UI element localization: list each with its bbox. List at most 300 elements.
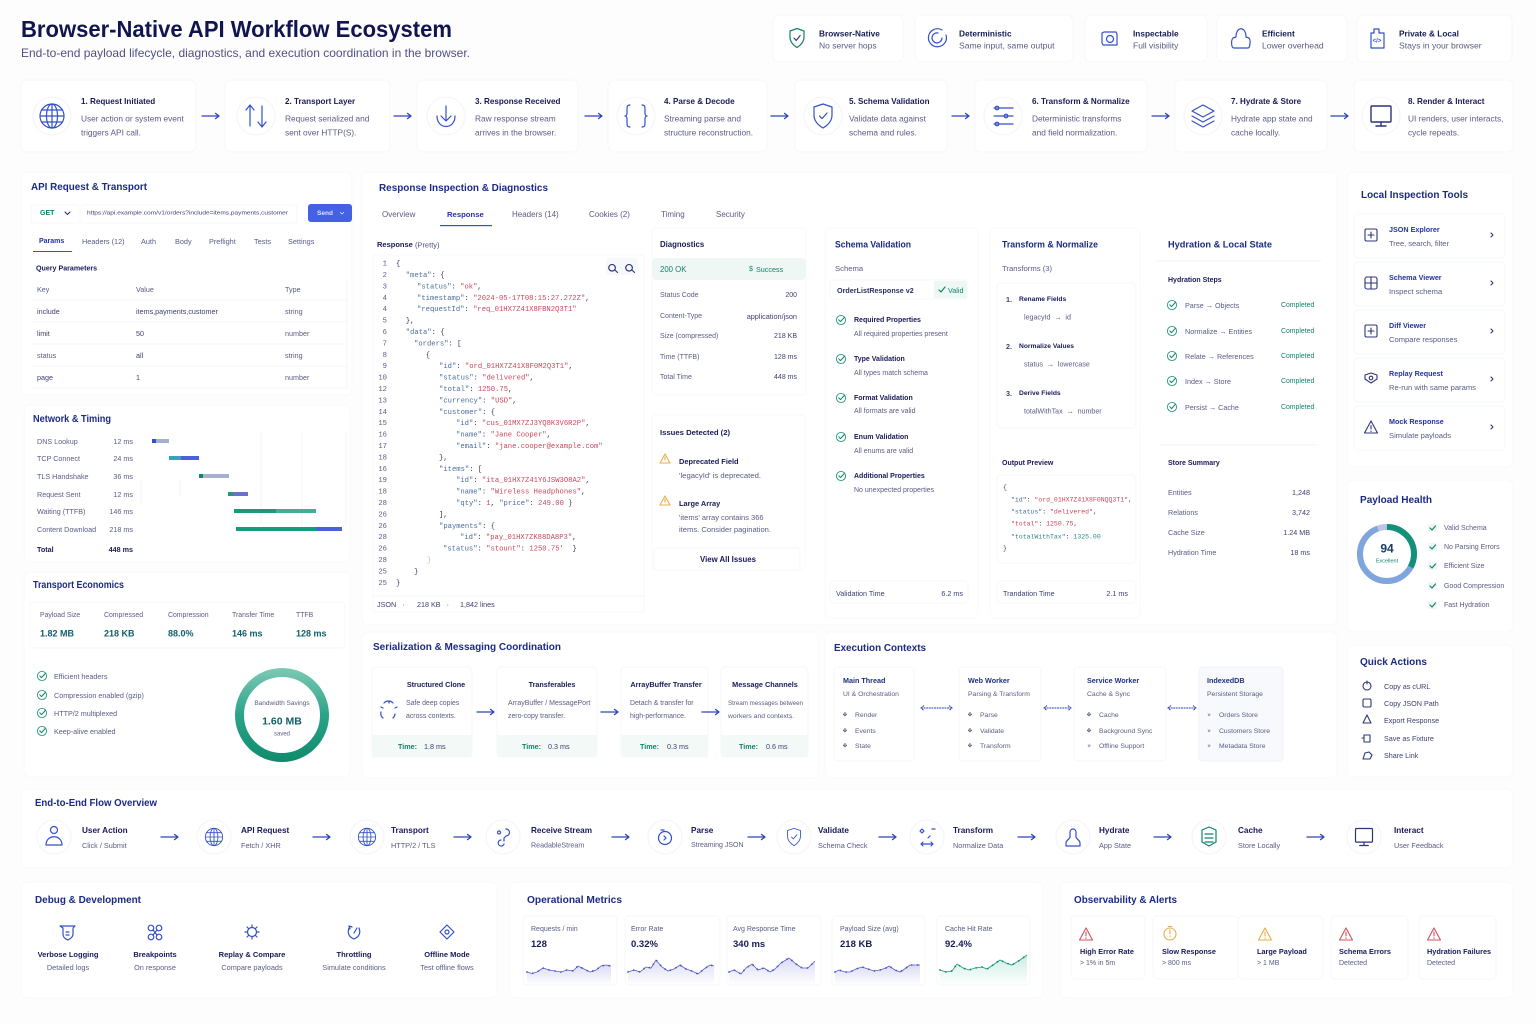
checklist: Compression enabled (gzip) [54, 691, 144, 700]
query parameters table: Value [136, 285, 154, 294]
stat cards: 146 ms [232, 628, 263, 638]
code viewer: 16 [378, 466, 387, 474]
transforms list: 3. [1006, 389, 1012, 398]
card: arraybuffer transfer: 0.3 ms [667, 742, 689, 751]
tool: diff viewer: Compare responses [1389, 335, 1458, 344]
tool: diff viewer [1354, 310, 1505, 354]
stat cards: 1.82 MB [40, 628, 75, 638]
code viewer: "status": "delivered", [439, 375, 534, 383]
code viewer: 4 [383, 295, 387, 303]
action list: Save as Fixture [1384, 734, 1434, 743]
code viewer: 13 [378, 397, 387, 405]
code viewer: "name": "Wireless Headphones", [456, 489, 585, 497]
code viewer: "id": "ita_01HX7Z41Y6JSW3O8A2", [456, 477, 590, 485]
tool: replay and compare: Replay & Compare [219, 950, 285, 959]
arrow [1152, 113, 1169, 119]
code viewer: { [426, 352, 430, 360]
card: transferables: zero-copy transfer. [508, 713, 565, 720]
stat cards: TTFB [296, 612, 314, 619]
step 5: 5. Schema Validation [849, 97, 930, 106]
code viewer: "timestamp": "2024-05-17T08:15:27.272Z", [417, 295, 590, 303]
card: arraybuffer transfer: Time: [640, 742, 659, 751]
diagnostics card: 200 OK [660, 265, 687, 274]
request tabs: Preflight [209, 237, 236, 246]
issues detected card [652, 415, 805, 570]
code viewer: 4 [383, 306, 387, 314]
step 1 [21, 80, 196, 152]
card: arraybuffer transfer: ArrayBuffer Transfer [630, 680, 702, 689]
card: indexeddb: » [1207, 712, 1211, 718]
metric: requests per minute: Requests / min [531, 926, 578, 933]
code viewer: 9 [383, 363, 387, 371]
code viewer: 1,842 lines [460, 600, 495, 609]
code viewer: 1 [383, 261, 387, 269]
metric: payload size: 218 KB [840, 939, 872, 950]
code viewer: "id": "pay_01HX7ZK88DA8P3", [460, 534, 576, 542]
step 2 [225, 80, 390, 152]
health checks: No Parsing Errors [1444, 544, 1500, 551]
card: transferables: Transferables [529, 680, 575, 689]
alert: hydration failures [1419, 916, 1496, 979]
arrow [454, 834, 471, 840]
arrow [161, 834, 178, 840]
flow: transform: Normalize Data [953, 841, 1004, 850]
issues detected card: Issues Detected (2) [660, 428, 731, 437]
output preview: Output Preview [1002, 460, 1054, 467]
code viewer: 3 [383, 283, 387, 291]
tool: replay request: Replay Request [1389, 369, 1444, 378]
arrow [202, 113, 219, 119]
tool: throttling [322, 926, 386, 972]
card: message channels [721, 667, 808, 757]
arrow [952, 113, 969, 119]
code viewer: 218 KB · [417, 600, 449, 609]
heading: Transform & Normalize [1002, 239, 1098, 249]
step 1: 1. Request Initiated [81, 97, 155, 106]
arrow [1018, 834, 1035, 840]
step 1: triggers API call. [81, 127, 141, 137]
translation time: 2.1 ms [1106, 589, 1128, 598]
card: transferables: ArrayBuffer / MessagePort [508, 700, 590, 707]
card: message channels: Time: [739, 742, 758, 751]
hydration steps: Index → Store [1185, 377, 1231, 386]
code viewer: } [427, 557, 431, 565]
code viewer: 8 [383, 352, 387, 360]
card: web worker: Transform [980, 743, 1011, 750]
health checks: Valid Schema [1444, 525, 1487, 532]
alert: slow response: Slow Response [1162, 947, 1216, 956]
validation list: Format Validation [854, 395, 913, 402]
panel: network and timing [24, 405, 350, 562]
flow: transport: HTTP/2 / TLS [391, 841, 436, 850]
stat cards: Payload Size [40, 612, 80, 619]
bandwidth donut: saved [274, 731, 290, 737]
alert: high error rate: High Error Rate [1080, 947, 1134, 956]
query parameters table [31, 264, 347, 388]
query parameters table: include [37, 307, 60, 316]
stat cards: 218 KB [104, 628, 135, 638]
code viewer: 26 [378, 523, 387, 531]
store summary: 1,248 [1292, 488, 1310, 497]
waterfall labels: 24 ms [113, 454, 133, 463]
metric: error rate [625, 916, 720, 985]
badge: private: Private & Local [1399, 28, 1459, 38]
heading: Operational Metrics [527, 895, 622, 906]
badge: deterministic: Deterministic [959, 28, 1012, 38]
card: indexeddb: Metadata Store [1219, 743, 1266, 750]
stat cards: Compressed [104, 612, 143, 619]
flow: transport: Transport [391, 826, 429, 835]
diagnostics card: $ [749, 266, 753, 273]
code viewer: "email": "jane.cooper@example.com" [456, 443, 603, 451]
store summary: 3,742 [1292, 508, 1310, 517]
alert: hydration failures: Hydration Failures [1427, 947, 1491, 956]
tool: json explorer: JSON Explorer [1389, 225, 1440, 234]
health checks: Good Compression [1444, 583, 1504, 590]
code viewer: 28 [378, 534, 387, 542]
code viewer: ], [439, 511, 448, 519]
step 6: 6. Transform & Normalize [1032, 97, 1130, 106]
code viewer: 18 [378, 489, 387, 497]
flow: user action [37, 820, 128, 854]
step 8: cycle repeats. [1408, 127, 1459, 137]
send button [308, 204, 352, 222]
card: indexeddb: IndexedDB [1207, 676, 1245, 685]
request tabs: Headers (12) [82, 237, 125, 246]
flow: cache: Store Locally [1238, 841, 1281, 850]
issues detected card: Deprecated Field [679, 457, 739, 466]
issues detected card: Large Array [679, 499, 721, 508]
validation time: 6.2 ms [941, 589, 963, 598]
diagnostics card: Size (compressed) [660, 333, 718, 340]
tool: breakpoints: Breakpoints [133, 950, 177, 959]
query parameters table: number [285, 373, 310, 382]
code viewer: 6 [383, 329, 387, 337]
metric: requests per minute [523, 916, 617, 985]
waterfall labels: Total [37, 545, 54, 554]
code viewer: 15 [378, 420, 387, 428]
step 6: Deterministic transforms [1032, 113, 1121, 123]
arrow [1307, 834, 1324, 840]
step 4: Streaming parse and [664, 113, 741, 123]
transforms list: Normalize Values [1019, 343, 1074, 350]
card: message channels: workers and contexts. [727, 713, 794, 720]
flow: transform: Transform [953, 826, 993, 835]
hydration steps: Completed [1281, 378, 1314, 385]
query parameters table: string [285, 307, 303, 316]
card: main thread: Main Thread [843, 676, 885, 685]
schema badge: OrderListResponse v2 [837, 286, 914, 295]
code viewer: 17 [378, 443, 387, 451]
card: main thread [834, 667, 914, 761]
code viewer: 28 [378, 500, 387, 508]
output preview: { [1003, 484, 1007, 491]
code viewer: "payments": { [439, 523, 495, 531]
code viewer: Response (Pretty) [377, 240, 440, 249]
card: structured clone [372, 667, 472, 757]
waterfall labels: TCP Connect [37, 454, 80, 463]
query parameters table: status [37, 351, 57, 360]
translation time: Trandation Time [1003, 589, 1055, 598]
panel: debug and development [21, 882, 497, 998]
arrow [612, 834, 629, 840]
method select [31, 205, 80, 223]
code viewer [373, 240, 644, 612]
request tabs: Tests [254, 237, 271, 246]
card: transferables: Time: [522, 742, 541, 751]
step 5 [795, 80, 947, 152]
tool: mock response [1354, 406, 1505, 450]
heading: Schema Validation [835, 239, 911, 249]
card: structured clone: 1.8 ms [424, 742, 446, 751]
validation list: Type Validation [854, 356, 905, 363]
flow: interact: Interact [1394, 826, 1424, 835]
step 7: Hydrate app state and [1231, 113, 1313, 123]
step 2: sent over HTTP(S). [285, 127, 356, 137]
flow: hydrate [1056, 820, 1131, 854]
card: indexeddb: » [1207, 743, 1211, 749]
validation list: Enum Validation [854, 434, 908, 441]
flow: validate [777, 820, 868, 854]
badge: inspectable: Inspectable [1133, 28, 1179, 38]
panel: API request and transport [21, 172, 352, 395]
panel: schema validation [825, 228, 978, 618]
alert: hydration failures: Detected [1427, 960, 1455, 967]
card: service worker: Background Sync [1099, 728, 1153, 735]
code viewer: 26 [378, 546, 387, 554]
step 7: 7. Hydrate & Store [1231, 97, 1302, 106]
alert: slow response [1153, 916, 1238, 979]
store summary [1168, 460, 1310, 557]
step 1: User action or system event [81, 113, 185, 123]
store summary: 18 ms [1290, 548, 1310, 557]
card: indexeddb: Persistent Storage [1207, 691, 1263, 698]
alert: slow response: > 800 ms [1162, 960, 1191, 967]
tool: offline mode: Test offline flows [420, 963, 474, 972]
metric: requests per minute: 128 [531, 939, 547, 950]
step 2: Request serialized and [285, 113, 370, 123]
panel: transform and normalize: Transforms (3) [1002, 264, 1053, 273]
tool: schema viewer [1354, 262, 1505, 306]
diagnostics card: 200 [785, 292, 797, 299]
issues detected card: 'legacyId' is deprecated. [679, 471, 761, 480]
tool: json explorer: Tree, search, filter [1389, 239, 1449, 248]
badge: browser-native: Browser-Native [819, 28, 880, 38]
output preview: "totalWithTax": 1325.00 [1011, 533, 1101, 540]
code viewer: 19 [378, 477, 387, 485]
card: service worker [1074, 667, 1166, 761]
card: main thread: ❖ [842, 728, 848, 734]
metric: error rate: Error Rate [631, 926, 663, 933]
card: web worker: ❖ [967, 712, 973, 718]
issues detected card: 'items' array contains 366 [679, 513, 764, 522]
metric: cache hit rate [937, 916, 1030, 985]
query parameters table: page [37, 373, 53, 382]
waterfall labels: 448 ms [109, 545, 133, 554]
tool: verbose logging [38, 926, 99, 972]
code viewer: "id": "cus_01MX7ZJ3YQ8K3V6R2P", [456, 420, 590, 428]
code viewer: }, [439, 454, 448, 462]
card: arraybuffer transfer: Detach & transfer for [630, 700, 694, 707]
diagnostics card: 218 KB [774, 333, 797, 340]
waterfall labels [37, 437, 133, 554]
method select: GET [40, 210, 55, 217]
step 7 [1175, 80, 1327, 152]
code viewer: "meta": { [406, 272, 445, 280]
card: structured clone: across contexts. [406, 713, 456, 720]
waterfall labels: Request Sent [37, 490, 81, 499]
tool: replay request [1354, 358, 1505, 402]
panel: response inspection and diagnostics [362, 172, 1337, 625]
bandwidth donut: Bandwidth Savings [254, 700, 310, 707]
code viewer: "currency": "USD", [439, 397, 517, 405]
code viewer: "id": "ord_01HX7Z41X8F0M2Q3T1", [439, 363, 573, 371]
code viewer: "orders": [ [414, 340, 461, 348]
issues detected card: items. Consider pagination. [679, 525, 771, 534]
query parameters table: all [136, 351, 144, 360]
flow: parse [648, 820, 744, 854]
waterfall labels: 146 ms [109, 507, 133, 516]
code viewer: "items": [ [439, 466, 482, 474]
heading: Serialization & Messaging Coordination [373, 642, 561, 653]
flow: receive stream: Receive Stream [531, 826, 592, 835]
code viewer: JSON · [377, 600, 405, 609]
tool: mock response: Mock Response [1389, 417, 1444, 426]
step 6: and field normalization. [1032, 127, 1117, 137]
alert: high error rate: > 1% in 5m [1080, 960, 1115, 967]
step 8: UI renders, user interacts, [1408, 113, 1503, 123]
hydration steps: Completed [1281, 353, 1314, 360]
card: web worker: ❖ [967, 743, 973, 749]
waterfall labels: Content Download [37, 525, 96, 534]
response tabs [382, 210, 745, 226]
alert: high error rate [1071, 916, 1145, 979]
code viewer: 14 [378, 409, 387, 417]
flow: interact [1347, 820, 1444, 854]
health donut [1360, 527, 1414, 581]
heading: Network & Timing [33, 414, 111, 425]
panel: execution contexts [825, 632, 1337, 778]
alert: large payload: Large Payload [1257, 947, 1307, 956]
code viewer: 12 [378, 386, 387, 394]
step 3: arrives in the browser. [475, 127, 556, 137]
flow: api request: Fetch / XHR [241, 841, 281, 850]
code viewer: 7 [383, 340, 387, 348]
waterfall labels: 36 ms [113, 472, 133, 481]
arrow [771, 113, 788, 119]
badge: private: Stays in your browser [1399, 40, 1482, 50]
url input [80, 205, 297, 223]
diagnostics card: Time (TTFB) [660, 354, 699, 361]
card: transferables [497, 667, 597, 757]
card: arraybuffer transfer: high-performance. [630, 713, 686, 720]
tool: diff viewer: Diff Viewer [1389, 321, 1426, 330]
tool: offline mode [420, 925, 474, 972]
step 3: 3. Response Received [475, 97, 561, 106]
flow: transform [910, 820, 1004, 854]
panel: schema validation: Schema [835, 264, 864, 273]
diagnostics card: application/json [747, 312, 797, 321]
card: indexeddb: Orders Store [1219, 712, 1258, 719]
request tabs: Settings [288, 237, 315, 246]
arrow [313, 834, 330, 840]
heading: Observability & Alerts [1074, 895, 1177, 906]
code viewer: 25 [378, 568, 387, 576]
card: structured clone: Structured Clone [407, 680, 465, 689]
card: service worker: » [1087, 743, 1091, 749]
waterfall labels: 12 ms [113, 437, 133, 446]
card: message channels: 0.6 ms [766, 742, 788, 751]
health donut: Excellent [1376, 558, 1399, 564]
store summary: Entities [1168, 488, 1192, 497]
transforms list: status → lowercase [1024, 360, 1090, 368]
code viewer: 2 [383, 272, 387, 280]
heading: Execution Contexts [834, 643, 926, 654]
card: service worker: ❖ [1086, 728, 1092, 734]
step 6 [975, 80, 1147, 152]
tool: schema viewer: Schema Viewer [1389, 273, 1442, 282]
validation list: No unexpected properties [854, 487, 935, 494]
card: main thread: Events [855, 728, 876, 735]
panel: serialization and messaging [362, 632, 818, 778]
card: web worker: Parsing & Transform [968, 691, 1030, 698]
alert: schema errors: Detected [1339, 960, 1367, 967]
card: indexeddb: » [1207, 728, 1211, 734]
code viewer: "customer": { [439, 409, 495, 417]
store summary: 1.24 MB [1283, 528, 1310, 537]
panel: operational metrics [510, 882, 1043, 998]
metric: cache hit rate: 92.4% [945, 939, 972, 950]
waterfall labels: 218 ms [109, 525, 133, 534]
tool: mock response: Simulate payloads [1389, 431, 1451, 440]
badge: browser-native: No server hops [819, 40, 877, 50]
card: main thread: ❖ [842, 712, 848, 718]
hydration steps: Hydration Steps [1168, 277, 1222, 284]
card: web worker [959, 667, 1041, 761]
diagnostics card [652, 228, 806, 395]
hydration steps [1167, 277, 1314, 412]
alert: schema errors [1331, 916, 1408, 979]
query parameters table: 1 [136, 373, 140, 382]
panel: observability and alerts [1060, 882, 1513, 998]
step 5: Validate data against [849, 113, 927, 123]
checklist: HTTP/2 multiplexed [54, 709, 117, 718]
card: arraybuffer transfer [621, 667, 708, 757]
request tabs: Params [39, 238, 64, 245]
tool: offline mode: Offline Mode [424, 950, 470, 959]
output preview: "total": 1250.75, [1011, 520, 1077, 527]
tool: json explorer [1354, 214, 1505, 258]
transforms list: Derive Fields [1019, 390, 1061, 397]
response tabs: Response [447, 210, 484, 219]
heading: Debug & Development [35, 895, 142, 906]
alert: large payload: > 1 MB [1257, 960, 1280, 967]
metric: payload size: Payload Size (avg) [840, 926, 899, 933]
query parameters table: Query Parameters [36, 264, 97, 272]
card: service worker: Service Worker [1087, 676, 1139, 685]
alert: large payload [1238, 916, 1323, 979]
arrow [585, 113, 602, 119]
card: main thread: ❖ [842, 743, 848, 749]
flow: user action: User Action [82, 826, 128, 835]
code viewer: "total": 1250.75, [439, 386, 512, 394]
code viewer: "status": "stount": 1250.75' } [443, 546, 577, 554]
code viewer: 5 [383, 318, 387, 326]
tool: replay and compare [219, 925, 285, 972]
badge: browser-native [773, 15, 903, 62]
arrow [601, 709, 618, 715]
request tabs: Auth [141, 237, 156, 246]
